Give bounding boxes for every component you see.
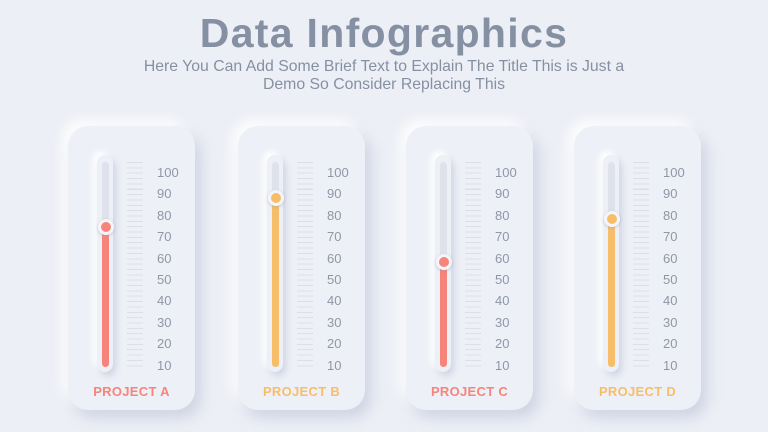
scale D: 100 xyxy=(663,165,685,180)
scale A: 100 xyxy=(157,165,179,180)
scale B: 50 xyxy=(327,272,341,287)
panel: project D xyxy=(574,126,701,410)
scale B: 40 xyxy=(327,293,341,308)
scale A: 10 xyxy=(157,358,171,373)
panel: project A xyxy=(68,126,195,410)
scale D: 60 xyxy=(663,251,677,266)
scale C: 90 xyxy=(495,186,509,201)
scale B: 100 xyxy=(327,165,349,180)
scale B: 10 xyxy=(327,358,341,373)
label B: PROJECT B xyxy=(263,384,340,399)
scale B: 80 xyxy=(327,208,341,223)
scale A xyxy=(157,165,179,373)
scale D: 20 xyxy=(663,336,677,351)
scale B: 90 xyxy=(327,186,341,201)
scale C: 40 xyxy=(495,293,509,308)
panel: project B xyxy=(238,126,365,410)
scale A: 40 xyxy=(157,293,171,308)
scale D: 30 xyxy=(663,315,677,330)
scale C: 60 xyxy=(495,251,509,266)
scale A: 80 xyxy=(157,208,171,223)
scale C: 70 xyxy=(495,229,509,244)
scale B xyxy=(327,165,349,373)
subtitle: Demo So Consider Replacing This xyxy=(263,76,505,92)
scale D xyxy=(663,165,685,373)
title: Data Infographics xyxy=(200,10,568,56)
scale A: 60 xyxy=(157,251,171,266)
scale B: 30 xyxy=(327,315,341,330)
scale A: 50 xyxy=(157,272,171,287)
scale D: 50 xyxy=(663,272,677,287)
scale B: 60 xyxy=(327,251,341,266)
scale A: 20 xyxy=(157,336,171,351)
scale D: 40 xyxy=(663,293,677,308)
scale B: 20 xyxy=(327,336,341,351)
scale D: 80 xyxy=(663,208,677,223)
scale C: 30 xyxy=(495,315,509,330)
scale A: 90 xyxy=(157,186,171,201)
scale A: 30 xyxy=(157,315,171,330)
label C: PROJECT C xyxy=(431,384,508,399)
label A: PROJECT A xyxy=(93,384,170,399)
scale C xyxy=(495,165,517,373)
scale D: 10 xyxy=(663,358,677,373)
scale A: 70 xyxy=(157,229,171,244)
scale C: 10 xyxy=(495,358,509,373)
gauge C xyxy=(435,155,451,372)
gauge A xyxy=(97,155,113,372)
panel: project C xyxy=(406,126,533,410)
gauge B xyxy=(267,155,283,372)
scale C: 100 xyxy=(495,165,517,180)
gauge D xyxy=(603,155,619,372)
scale D: 70 xyxy=(663,229,677,244)
subtitle: Here You Can Add Some Brief Text to Explain The Title This is Just a xyxy=(144,58,624,75)
scale C: 80 xyxy=(495,208,509,223)
subtitle xyxy=(144,58,624,92)
scale D: 90 xyxy=(663,186,677,201)
scale B: 70 xyxy=(327,229,341,244)
scale C: 50 xyxy=(495,272,509,287)
scale C: 20 xyxy=(495,336,509,351)
label D: PROJECT D xyxy=(599,384,676,399)
